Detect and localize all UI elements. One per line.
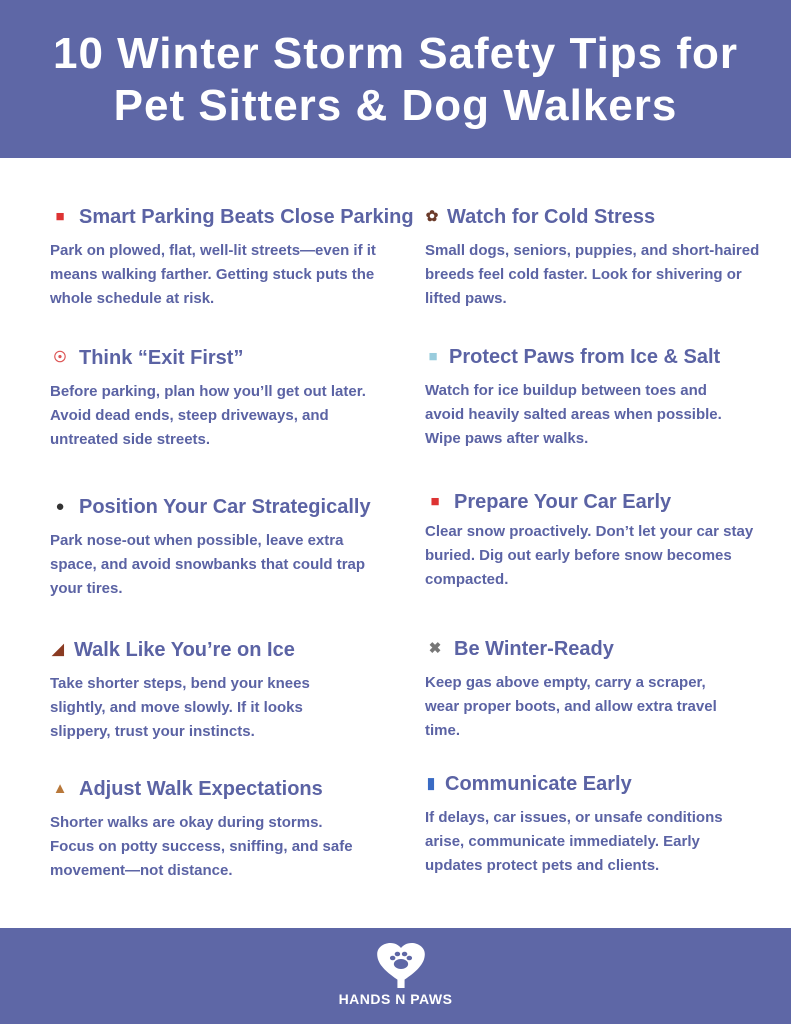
tip: position car: ●: [55, 498, 65, 515]
tip: walk on ice: ◢: [52, 641, 64, 658]
tip: smart parking: Park on plowed, flat, well-lit streets—even if it: [50, 242, 376, 259]
tip: communicate: Communicate Early: [445, 773, 632, 795]
tip: exit first: ☉: [53, 349, 67, 366]
title: [53, 29, 738, 130]
tip: winter-ready: time.: [425, 722, 460, 739]
tip: walk on ice: [50, 639, 310, 740]
tip: walk on ice: Take shorter steps, bend your knees: [50, 675, 310, 692]
tip: cold stress: Watch for Cold Stress: [447, 206, 655, 228]
tip: communicate: arise, communicate immediately. Early: [425, 833, 700, 850]
tip: winter-ready: ✖: [429, 640, 441, 657]
tip: smart parking: Smart Parking Beats Close Parking: [79, 206, 414, 228]
tip: prepare car: Prepare Your Car Early: [454, 491, 671, 513]
title: 10 Winter Storm Safety Tips for: [53, 29, 738, 78]
tip: prepare car: Clear snow proactively. Don’t let your car stay: [425, 523, 753, 540]
tip: protect paws: Protect Paws from Ice & Salt: [449, 346, 720, 368]
footer: [0, 928, 791, 1024]
logo: heart paw: [377, 943, 425, 988]
tip: cold stress: lifted paws.: [425, 290, 507, 307]
tip: position car: [50, 496, 371, 597]
tip: communicate: If delays, car issues, or unsafe conditions: [425, 809, 723, 826]
tip: protect paws: Watch for ice buildup between toes and: [425, 382, 707, 399]
tip: position car: Park nose-out when possible, leave extra: [50, 532, 343, 549]
tip: cold stress: ✿: [426, 208, 438, 225]
tip: walk expectations: Focus on potty success, sniffing, and safe: [50, 838, 353, 855]
tip: protect paws: avoid heavily salted areas when possible.: [425, 406, 722, 423]
tip: prepare car: ■: [430, 493, 440, 510]
tip: smart parking: whole schedule at risk.: [50, 290, 214, 307]
tip: communicate: ▮: [427, 775, 435, 792]
tip: communicate: [425, 773, 723, 874]
tip: smart parking: means walking farther. Getting stuck puts the: [50, 266, 374, 283]
tip: exit first: Avoid dead ends, steep driveways, and: [50, 407, 329, 424]
tip: winter-ready: Keep gas above empty, carry a scraper,: [425, 674, 706, 691]
tip: winter-ready: Be Winter-Ready: [454, 638, 614, 660]
tip: position car: space, and avoid snowbanks that could trap: [50, 556, 365, 573]
tip: cold stress: [425, 206, 759, 307]
tip: exit first: Before parking, plan how you’ll get out later.: [50, 383, 366, 400]
tip: walk expectations: Adjust Walk Expectations: [79, 778, 323, 800]
tip: communicate: updates protect pets and clients.: [425, 857, 659, 874]
tip: protect paws: ■: [428, 348, 438, 365]
tip: position car: Position Your Car Strategically: [79, 496, 371, 518]
tip: cold stress: breeds feel cold faster. Look for shivering or: [425, 266, 742, 283]
tip: protect paws: Wipe paws after walks.: [425, 430, 588, 447]
logo text: HANDS N PAWS: [339, 991, 452, 1007]
tip: walk expectations: movement—not distance.: [50, 862, 233, 879]
tip: walk expectations: Shorter walks are okay during storms.: [50, 814, 323, 831]
tip: winter-ready: [425, 638, 717, 739]
tip: cold stress: Small dogs, seniors, puppies, and short-haired: [425, 242, 759, 259]
tip: walk expectations: ▲: [53, 780, 67, 797]
tip: position car: your tires.: [50, 580, 123, 597]
tip: protect paws: [425, 346, 722, 447]
header banner: [0, 0, 791, 158]
tip: smart parking: ■: [55, 208, 65, 225]
tip: exit first: [50, 347, 366, 448]
tip: prepare car: [425, 491, 754, 588]
tip: walk on ice: slightly, and move slowly. If it looks: [50, 699, 303, 716]
tip: smart parking: [50, 206, 414, 307]
title: Pet Sitters & Dog Walkers: [114, 81, 677, 130]
tip: exit first: untreated side streets.: [50, 431, 210, 448]
tip: walk expectations: [50, 778, 353, 879]
tip: exit first: Think “Exit First”: [79, 347, 243, 369]
tip: winter-ready: wear proper boots, and allow extra travel: [425, 698, 717, 715]
tip: prepare car: buried. Dig out early before snow becomes: [425, 547, 732, 564]
tip: walk on ice: Walk Like You’re on Ice: [74, 639, 295, 661]
tip: prepare car: compacted.: [425, 571, 508, 588]
tip: walk on ice: slippery, trust your instincts.: [50, 723, 255, 740]
